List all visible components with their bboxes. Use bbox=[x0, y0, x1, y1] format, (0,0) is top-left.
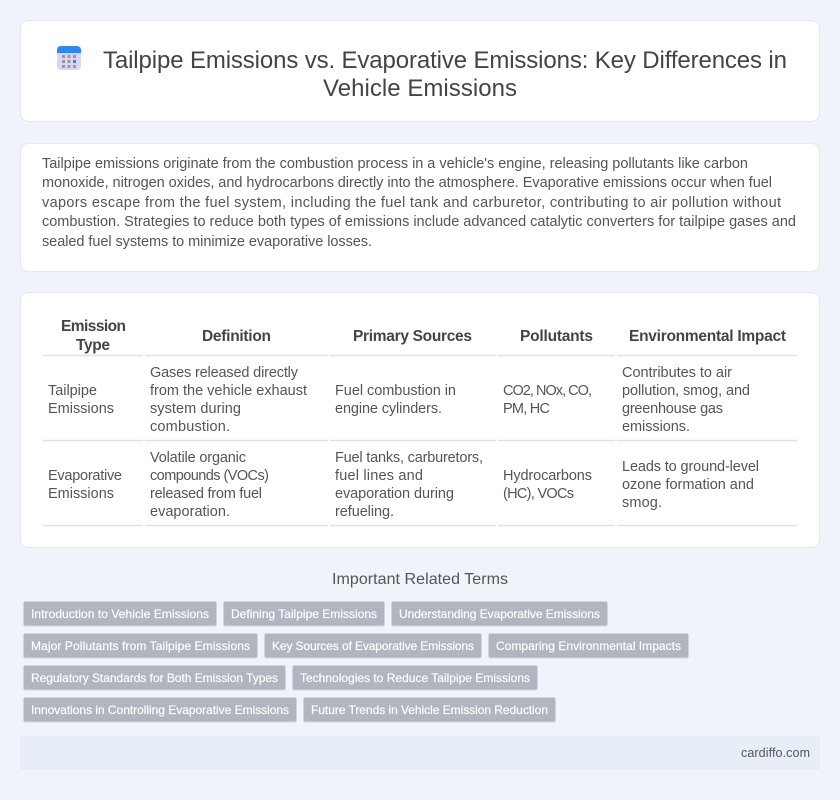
table row: tailpipe emissions: PM, HC bbox=[503, 401, 550, 417]
title: Vehicle Emissions bbox=[323, 75, 517, 102]
footer bbox=[20, 736, 820, 770]
table row: tailpipe emissions: Fuel combustion in bbox=[335, 383, 456, 399]
text block: description: monoxide, nitrogen oxides, and hydrocarbons directly into the atmosphere. Evaporative emissions occur when fuel bbox=[42, 175, 772, 191]
tag list: related terms: Key Sources of Evaporative Emissions bbox=[272, 639, 474, 653]
table row: tailpipe emissions: Gases released directly bbox=[150, 365, 299, 381]
tag list: related terms: Defining Tailpipe Emissions bbox=[231, 607, 377, 621]
tag list: related terms: Innovations in Controlling Evaporative Emissions bbox=[31, 703, 289, 717]
text block: description bbox=[42, 156, 796, 250]
table row: evaporative emissions: (HC), VOCs bbox=[503, 486, 574, 502]
table row: evaporative emissions: evaporation during bbox=[335, 486, 454, 502]
table header bbox=[61, 318, 786, 354]
table row: evaporative emissions: fuel lines and bbox=[335, 468, 423, 484]
tag list: related terms: Comparing Environmental Impacts bbox=[496, 639, 681, 653]
table header: Emission bbox=[61, 318, 126, 335]
table header: Type bbox=[76, 337, 110, 354]
tag list: related terms: Technologies to Reduce Tailpipe Emissions bbox=[300, 671, 530, 685]
table row: evaporative emissions: ozone formation and bbox=[622, 477, 754, 493]
tag list: related terms: Understanding Evaporative Emissions bbox=[399, 607, 600, 621]
icon: calendar bbox=[57, 46, 81, 70]
table row: tailpipe emissions: system during bbox=[150, 401, 241, 417]
table row: evaporative emissions: released from fuel bbox=[150, 486, 262, 502]
title bbox=[103, 47, 787, 102]
table row: evaporative emissions: Evaporative bbox=[48, 468, 122, 484]
table row: tailpipe emissions: CO2, NOx, CO, bbox=[503, 383, 592, 399]
text block: description: combustion. Strategies to reduce both types of emissions include advanced catalytic converters for tailpipe gases and bbox=[42, 214, 796, 230]
table row: evaporative emissions: compounds (VOCs) bbox=[150, 468, 269, 484]
table row: evaporative emissions: evaporation. bbox=[150, 504, 230, 520]
table row: tailpipe emissions: Tailpipe bbox=[48, 383, 97, 399]
table row: evaporative emissions: Emissions bbox=[48, 486, 114, 502]
table header: Definition bbox=[202, 328, 271, 345]
tag list: related terms bbox=[24, 602, 688, 722]
text block: description: Tailpipe emissions originate from the combustion process in a vehicle's engine, releasing pollutants like carbon bbox=[42, 156, 748, 172]
table row: tailpipe emissions: Emissions bbox=[48, 401, 114, 417]
table row: tailpipe emissions: combustion. bbox=[150, 419, 230, 435]
tag list: related terms: Future Trends in Vehicle Emission Reduction bbox=[311, 703, 548, 717]
table header: Environmental Impact bbox=[629, 328, 786, 345]
table row: tailpipe emissions: from the vehicle exhaust bbox=[150, 383, 307, 399]
tag list: related terms: Introduction to Vehicle Emissions bbox=[31, 607, 209, 621]
text block: description: sealed fuel systems to minimize evaporative losses. bbox=[42, 234, 372, 250]
table row: evaporative emissions: Fuel tanks, carburetors, bbox=[335, 450, 483, 466]
table row: tailpipe emissions bbox=[48, 365, 750, 435]
panel: comparison table bbox=[20, 292, 820, 548]
table row: evaporative emissions: refueling. bbox=[335, 504, 394, 520]
table row: evaporative emissions bbox=[48, 450, 759, 520]
table row: evaporative emissions: Hydrocarbons bbox=[503, 468, 592, 484]
tag list: related terms: Regulatory Standards for Both Emission Types bbox=[31, 671, 278, 685]
table header: Primary Sources bbox=[353, 328, 472, 345]
table row: evaporative emissions: Leads to ground-level bbox=[622, 459, 759, 475]
table row: tailpipe emissions: engine cylinders. bbox=[335, 401, 442, 417]
tag list: related terms: Major Pollutants from Tailpipe Emissions bbox=[31, 639, 250, 653]
heading: related terms: Important Related Terms bbox=[332, 571, 508, 588]
table row: evaporative emissions: Volatile organic bbox=[150, 450, 246, 466]
footer: cardiffo.com bbox=[741, 746, 810, 760]
text block: description: vapors escape from the fuel system, including the fuel tank and carburetor, contributing to air pollution without bbox=[42, 195, 781, 211]
table row: tailpipe emissions: greenhouse gas bbox=[622, 401, 723, 417]
panel: header bbox=[20, 20, 820, 122]
table row: tailpipe emissions: pollution, smog, and bbox=[622, 383, 750, 399]
table row: tailpipe emissions: emissions. bbox=[622, 419, 690, 435]
table header: Pollutants bbox=[520, 328, 593, 345]
table row: evaporative emissions: smog. bbox=[622, 495, 662, 511]
panel: description bbox=[20, 144, 820, 272]
title: Tailpipe Emissions vs. Evaporative Emissions: Key Differences in bbox=[103, 47, 787, 74]
table row: tailpipe emissions: Contributes to air bbox=[622, 365, 732, 381]
